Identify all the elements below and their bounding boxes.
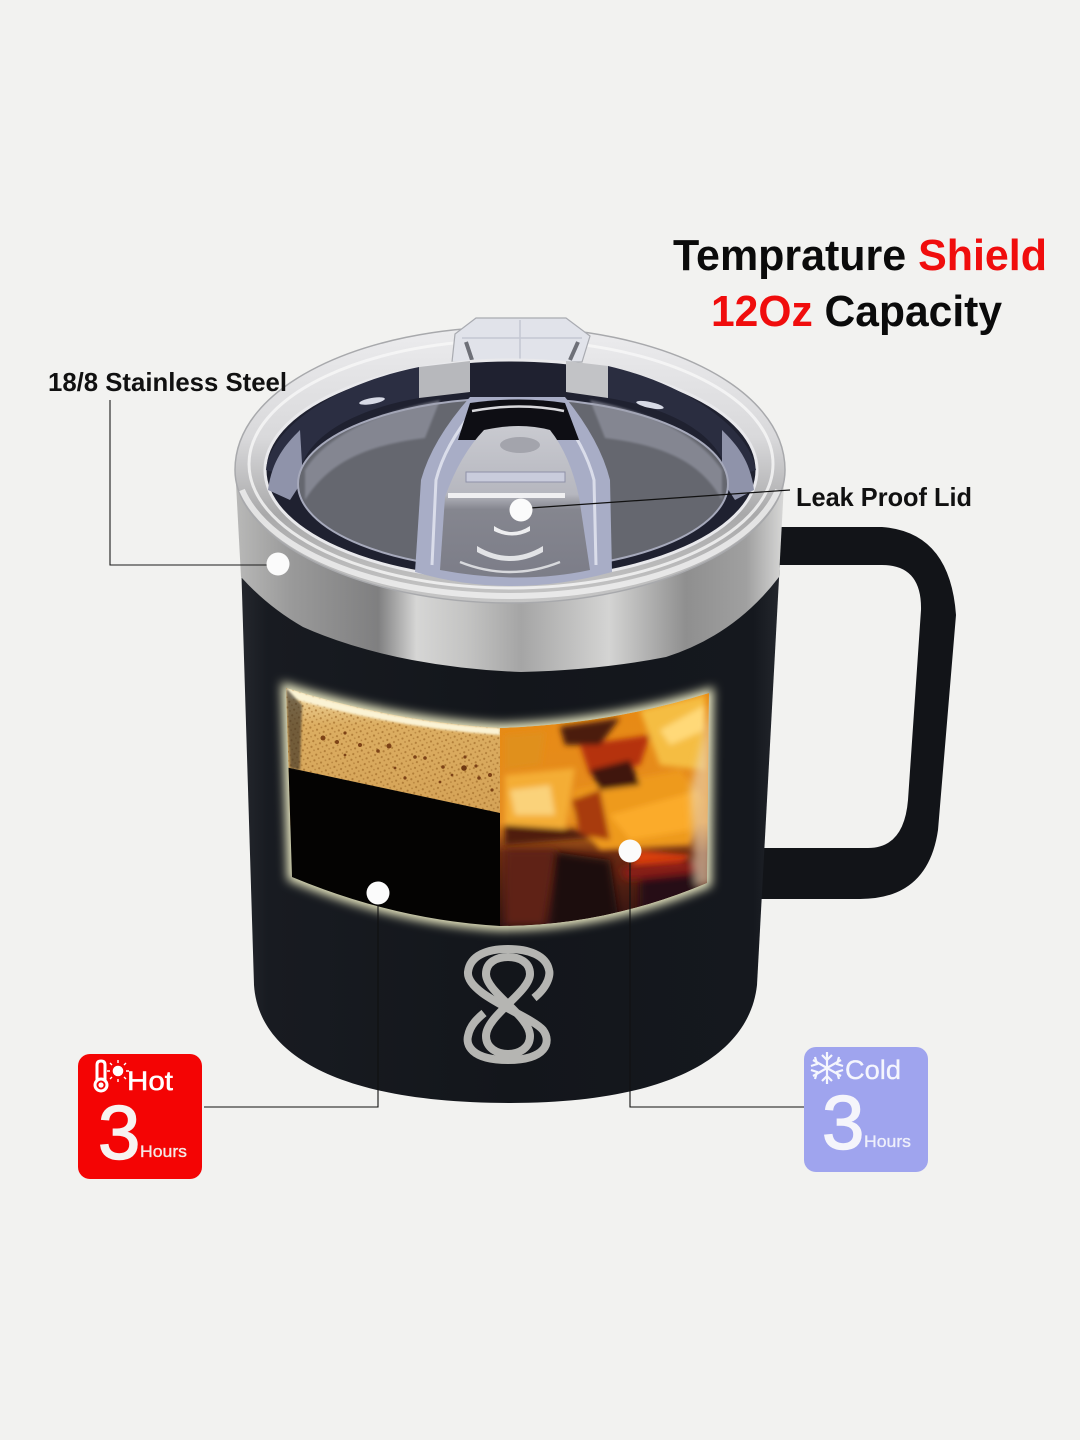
slider bar details — [448, 437, 565, 572]
badge background — [78, 1054, 202, 1179]
channel highlights — [432, 410, 596, 565]
slider hump — [440, 426, 590, 578]
number 3: 3 — [98, 1091, 140, 1176]
callout: cold badge — [618, 840, 928, 1172]
title line one: Temprature Shield — [673, 231, 1047, 280]
hot label: Hot — [127, 1066, 174, 1096]
hours label: Hours — [140, 1142, 187, 1161]
cold label: Cold — [845, 1055, 901, 1085]
icon: sun — [107, 1060, 129, 1082]
steel band — [235, 465, 785, 672]
mug body — [241, 560, 780, 1103]
logo inner loop — [486, 957, 530, 1054]
leader line — [110, 400, 268, 565]
dark cola lower — [505, 700, 712, 930]
lid floor upper sheen right — [590, 400, 722, 500]
marker dot — [510, 498, 532, 522]
lid rim inner groove — [249, 340, 773, 588]
hours label: Hours — [864, 1132, 911, 1151]
opening highlight — [472, 406, 564, 411]
ice cubes — [505, 695, 705, 868]
window glow — [286, 688, 709, 926]
sip channel — [415, 397, 612, 586]
marker dot — [618, 840, 642, 862]
leader line — [530, 490, 790, 508]
brand logo — [468, 949, 549, 1060]
lid inner reflections — [266, 361, 756, 500]
mug — [235, 318, 956, 1103]
lid rim lower highlight — [242, 490, 778, 596]
marker dot — [266, 552, 290, 576]
dark coffee — [285, 767, 500, 930]
callout: leak proof lid — [510, 482, 972, 522]
label: Leak Proof Lid — [796, 482, 972, 512]
window: hot and cold drinks — [280, 680, 714, 930]
title line two: 12Oz Capacity — [711, 287, 1003, 336]
label: 18/8 Stainless Steel — [48, 367, 287, 397]
infographic canvas — [50, 238, 1044, 1179]
number 3: 3 — [822, 1081, 864, 1166]
iced drink — [499, 690, 714, 930]
leader line — [204, 904, 378, 1107]
icon: thermometer — [95, 1061, 107, 1091]
coffee foam — [280, 680, 502, 830]
lid outer rim — [235, 327, 785, 603]
title — [673, 231, 1047, 336]
icon: snowflake — [811, 1052, 843, 1084]
logo outer loop — [468, 949, 549, 1060]
lid pull tab — [452, 318, 590, 362]
leader line — [630, 862, 804, 1107]
callout: stainless steel — [48, 367, 290, 576]
callout: hot badge — [78, 882, 390, 1179]
lid floor upper sheen — [305, 400, 440, 500]
mug handle — [755, 527, 956, 899]
badge background — [804, 1047, 928, 1172]
clear lid — [235, 318, 785, 603]
inner shadow at left — [286, 688, 302, 770]
marker dot — [366, 882, 390, 904]
lid floor — [298, 398, 728, 570]
channel dark opening — [458, 400, 579, 440]
lid inner ring — [265, 360, 757, 580]
